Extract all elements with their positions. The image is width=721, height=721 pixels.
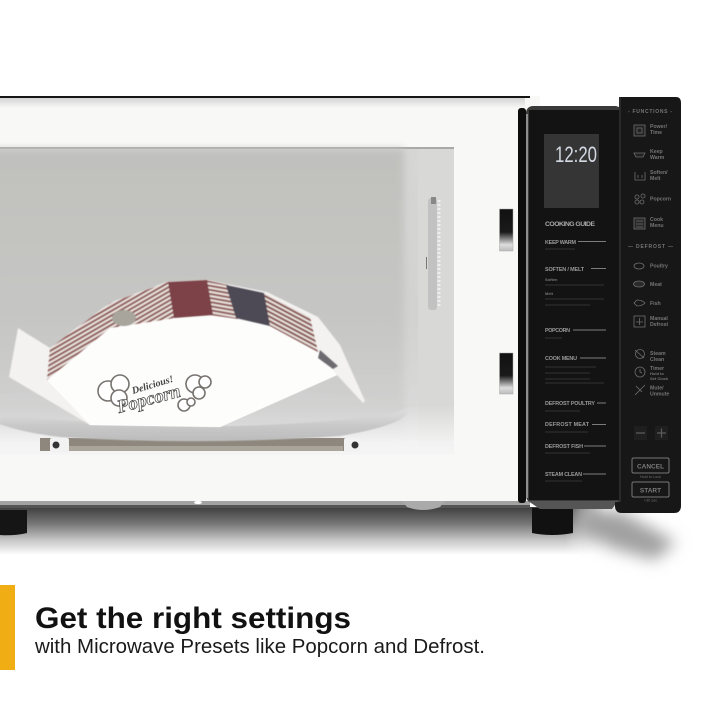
function labels: Unmute xyxy=(650,392,669,398)
control panel: functions column xyxy=(615,97,681,513)
cancel button xyxy=(632,458,669,479)
function labels: Hold to xyxy=(650,371,664,376)
turntable xyxy=(0,385,408,452)
floor shadow under microwave xyxy=(0,507,676,560)
function labels: Meat xyxy=(650,282,662,288)
function labels: Keep xyxy=(650,149,663,155)
popcorn bag xyxy=(9,280,365,427)
control panel: door section xyxy=(518,106,622,509)
cooking guide labels: COOK MENU xyxy=(545,356,577,362)
cooking guide labels: COOKING GUIDE xyxy=(545,221,595,228)
function labels: Mute/ xyxy=(650,386,664,392)
cooking guide labels: DEFROST POULTRY xyxy=(545,401,595,407)
function icons xyxy=(634,125,645,395)
popcorn logo xyxy=(98,374,211,418)
cooking guide labels: STEAM CLEAN xyxy=(545,472,582,478)
function labels: Fish xyxy=(650,301,661,307)
popcorn logo: Delicious! xyxy=(130,374,175,397)
function labels: Poultry xyxy=(650,264,668,270)
function labels: Manual xyxy=(650,316,668,322)
function labels: Steam xyxy=(650,351,666,357)
yellow accent bar xyxy=(0,585,15,670)
function labels: Menu xyxy=(650,223,664,229)
cooking guide labels: DEFROST FISH xyxy=(545,444,583,450)
side vent xyxy=(426,197,439,310)
printed band with stripes xyxy=(47,280,338,380)
heading: Get the right settings xyxy=(35,602,351,635)
digital display xyxy=(544,134,599,208)
start button: +30 sec xyxy=(644,498,657,502)
cooking guide labels: DEFROST MEAT xyxy=(545,422,590,428)
function labels xyxy=(628,109,673,398)
function labels: Defrost xyxy=(650,322,668,328)
cooking guide labels: KEEP WARM xyxy=(545,240,576,246)
function labels: Clean xyxy=(650,357,664,363)
digital display: 12:20 xyxy=(555,142,597,167)
function labels: Melt xyxy=(650,176,661,182)
door latch slots xyxy=(500,209,513,394)
start button: START xyxy=(640,488,661,494)
cooking guide labels: Melt xyxy=(545,291,554,296)
function labels: Soften/ xyxy=(650,170,668,176)
oven cavity xyxy=(0,147,454,455)
cooking guide labels: Soften xyxy=(545,277,558,282)
microwave feet xyxy=(0,508,573,535)
cooking guide labels xyxy=(545,221,595,478)
faint guide detail lines xyxy=(545,249,604,481)
cooking guide labels: POPCORN xyxy=(545,328,570,334)
start button xyxy=(632,482,669,502)
guide rule lines xyxy=(573,242,606,474)
microwave body xyxy=(0,96,540,510)
subheading: with Microwave Presets like Popcorn and Defrost. xyxy=(34,636,485,658)
function labels: - FUNCTIONS - xyxy=(628,109,672,115)
cooking guide labels: SOFTEN / MELT xyxy=(545,267,585,273)
function labels: Popcorn xyxy=(650,196,671,202)
function labels: Time xyxy=(650,130,662,136)
function labels: Timer xyxy=(650,366,664,372)
function labels: Set Clock xyxy=(650,376,669,381)
function labels: Power/ xyxy=(650,124,668,130)
popcorn logo: Popcorn xyxy=(114,382,183,418)
cancel button: Hold to Lock xyxy=(640,475,661,479)
function labels: — DEFROST — xyxy=(628,244,673,250)
cancel button: CANCEL xyxy=(637,464,664,470)
function labels: Cook xyxy=(650,217,663,223)
plus and minus buttons xyxy=(634,426,668,440)
function labels: Warm xyxy=(650,155,665,161)
